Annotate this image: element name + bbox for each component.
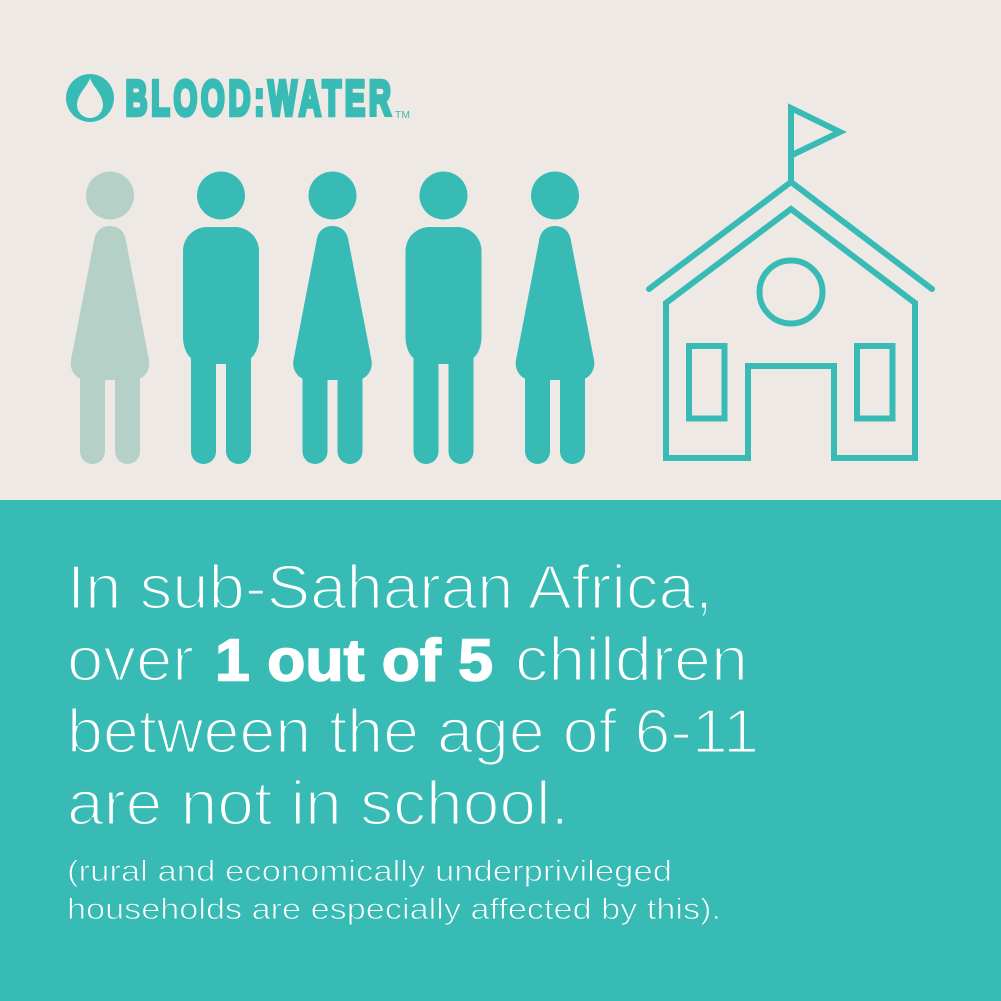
icon: boy — [406, 172, 482, 464]
panel: message background — [0, 500, 1001, 1001]
headline: over — [67, 626, 194, 694]
footnote: (rural and economically underprivileged — [67, 855, 672, 888]
roof — [649, 182, 932, 289]
icon: school building — [649, 108, 932, 458]
right window — [857, 346, 892, 418]
icon: faded girl, out of school — [71, 172, 149, 464]
row of children — [71, 172, 594, 464]
footnote — [67, 855, 721, 926]
headline: between the age of 6-11 — [67, 698, 759, 766]
headline: are not in school. — [67, 770, 569, 838]
headline — [67, 554, 759, 838]
building outline with door — [666, 209, 915, 458]
icon: girl — [516, 172, 594, 464]
icon: boy — [183, 172, 259, 464]
round window — [760, 260, 822, 324]
icon: water drop in circle — [66, 74, 114, 122]
headline: In sub-Saharan Africa, — [67, 554, 713, 622]
left window — [689, 346, 724, 418]
headline: children — [515, 626, 748, 694]
highlighted statistic: 1 out of 5 — [215, 628, 493, 694]
trademark: TM — [395, 110, 410, 121]
footnote: households are especially affected by this). — [67, 893, 721, 926]
icon: girl — [293, 172, 372, 464]
flag — [791, 108, 840, 182]
logo wordmark: BLOOD:WATER — [126, 71, 391, 126]
logo: Blood:Water — [66, 71, 410, 126]
